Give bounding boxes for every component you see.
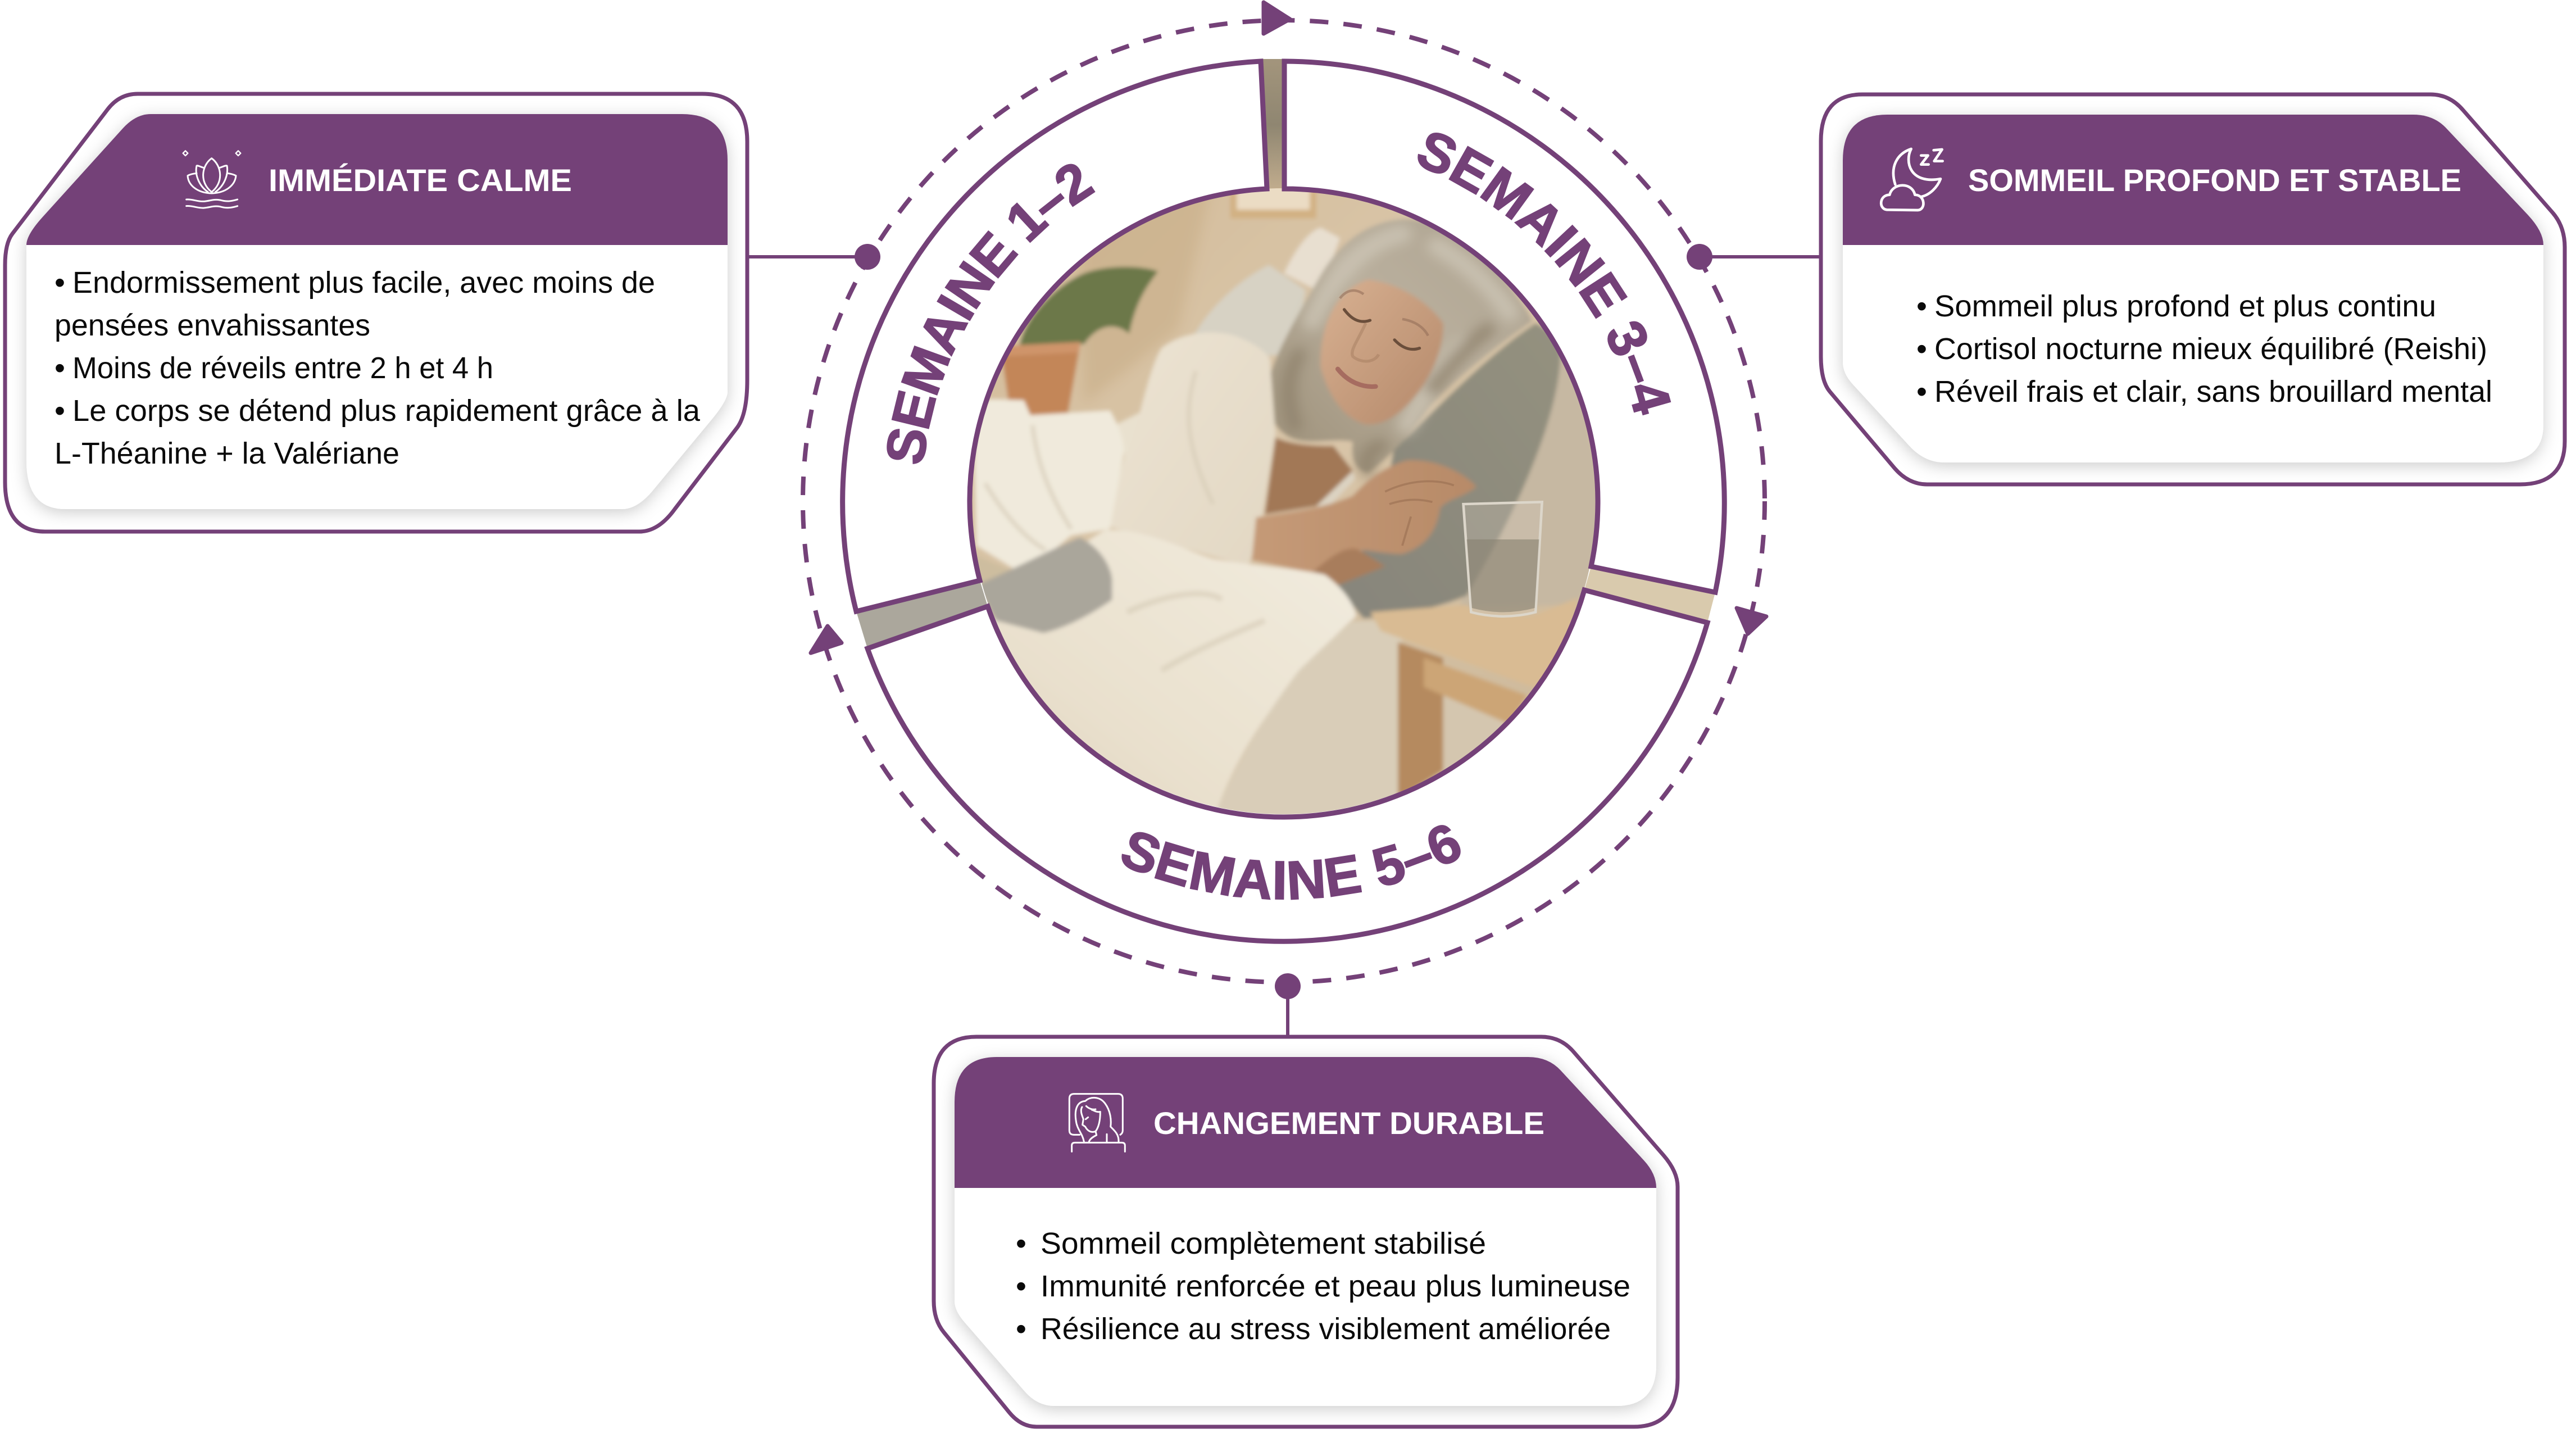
- label: SEMAINE 5-6: SEMAINE 5–6: [1121, 825, 1461, 900]
- connector: right panel to dot: [1700, 255, 1821, 258]
- body text: changement durable: •: [1016, 1227, 1026, 1260]
- dot: bottom: [1275, 973, 1301, 999]
- ring gap: lower right: [1584, 566, 1715, 623]
- ring gap: top: [1261, 59, 1284, 191]
- heading: immédiate calme: IMMÉDIATE CALME: [269, 162, 572, 198]
- body text: sommeil profond et stable: Sommeil plus profond et plus continu: [1934, 289, 2436, 323]
- panel header: [1843, 115, 2543, 245]
- segment: Semaine 1-2: [843, 61, 1267, 611]
- body text: sommeil profond et stable: •: [1916, 289, 1927, 323]
- body text: immédiate calme: Le corps se détend plus rapidement grâce à la: [72, 394, 701, 428]
- body text: immédiate calme: •: [54, 351, 65, 385]
- body text: changement durable: Immunité renforcée et peau plus lumineuse: [1041, 1269, 1630, 1303]
- connector: left panel to dot: [747, 255, 867, 258]
- segment: Semaine 3-4: [1284, 61, 1724, 592]
- facial features and glass: [1338, 291, 1542, 616]
- icon: lotus: [183, 151, 240, 208]
- body text: changement durable: Sommeil complètement stabilisé: [1041, 1227, 1486, 1260]
- panel header: [26, 114, 728, 245]
- heading: sommeil profond et stable: SOMMEIL PROFOND ET STABLE: [1968, 162, 2461, 198]
- dot: left: [855, 244, 880, 270]
- body text: changement durable: Résilience au stress visiblement améliorée: [1041, 1312, 1611, 1346]
- body text: sommeil profond et stable: [1916, 289, 2492, 409]
- icon: moon and cloud: [1881, 149, 1943, 210]
- panel header: [955, 1057, 1656, 1188]
- body text: immédiate calme: •: [54, 266, 65, 300]
- icon: woman on pillow: [1069, 1094, 1125, 1151]
- label: SEMAINE 3-4: SEMAINE 3–4: [1418, 133, 1671, 416]
- central photo: woman sleeping: [972, 188, 1596, 814]
- body text: sommeil profond et stable: •: [1916, 375, 1927, 409]
- dashed cycle ring: [803, 20, 1765, 982]
- panel: changement durable: [934, 1037, 1678, 1427]
- panel: sommeil profond et stable: [1821, 94, 2565, 484]
- body text: immédiate calme: pensées envahissantes: [54, 309, 370, 342]
- body text: immédiate calme: L-Théanine + la Valériane: [54, 437, 399, 470]
- arrow: left: [811, 626, 842, 653]
- body text: sommeil profond et stable: •: [1916, 332, 1927, 366]
- segment: Semaine 5-6: [867, 590, 1707, 941]
- arrow: right: [1737, 608, 1766, 634]
- heading: changement durable: CHANGEMENT DURABLE: [1153, 1105, 1544, 1141]
- body text: immédiate calme: •: [54, 394, 65, 428]
- body text: changement durable: •: [1016, 1312, 1026, 1346]
- ring gap: lower left: [856, 580, 988, 648]
- panel: immédiate calme: [5, 94, 747, 532]
- label: SEMAINE 1-2: SEMAINE 1–2: [887, 164, 1096, 464]
- dot: right: [1687, 244, 1712, 270]
- arrow: top: [1264, 2, 1290, 34]
- body text: changement durable: •: [1016, 1269, 1026, 1303]
- body text: changement durable: [1016, 1227, 1630, 1346]
- connector: bottom panel to dot: [1286, 986, 1289, 1037]
- body text: immédiate calme: Moins de réveils entre 2 h et 4 h: [72, 351, 493, 385]
- body text: immédiate calme: Endormissement plus facile, avec moins de: [72, 266, 655, 300]
- body text: sommeil profond et stable: Cortisol nocturne mieux équilibré (Reishi): [1934, 332, 2487, 366]
- body text: sommeil profond et stable: Réveil frais et clair, sans brouillard mental: [1934, 375, 2492, 409]
- body text: immédiate calme: [54, 266, 701, 470]
